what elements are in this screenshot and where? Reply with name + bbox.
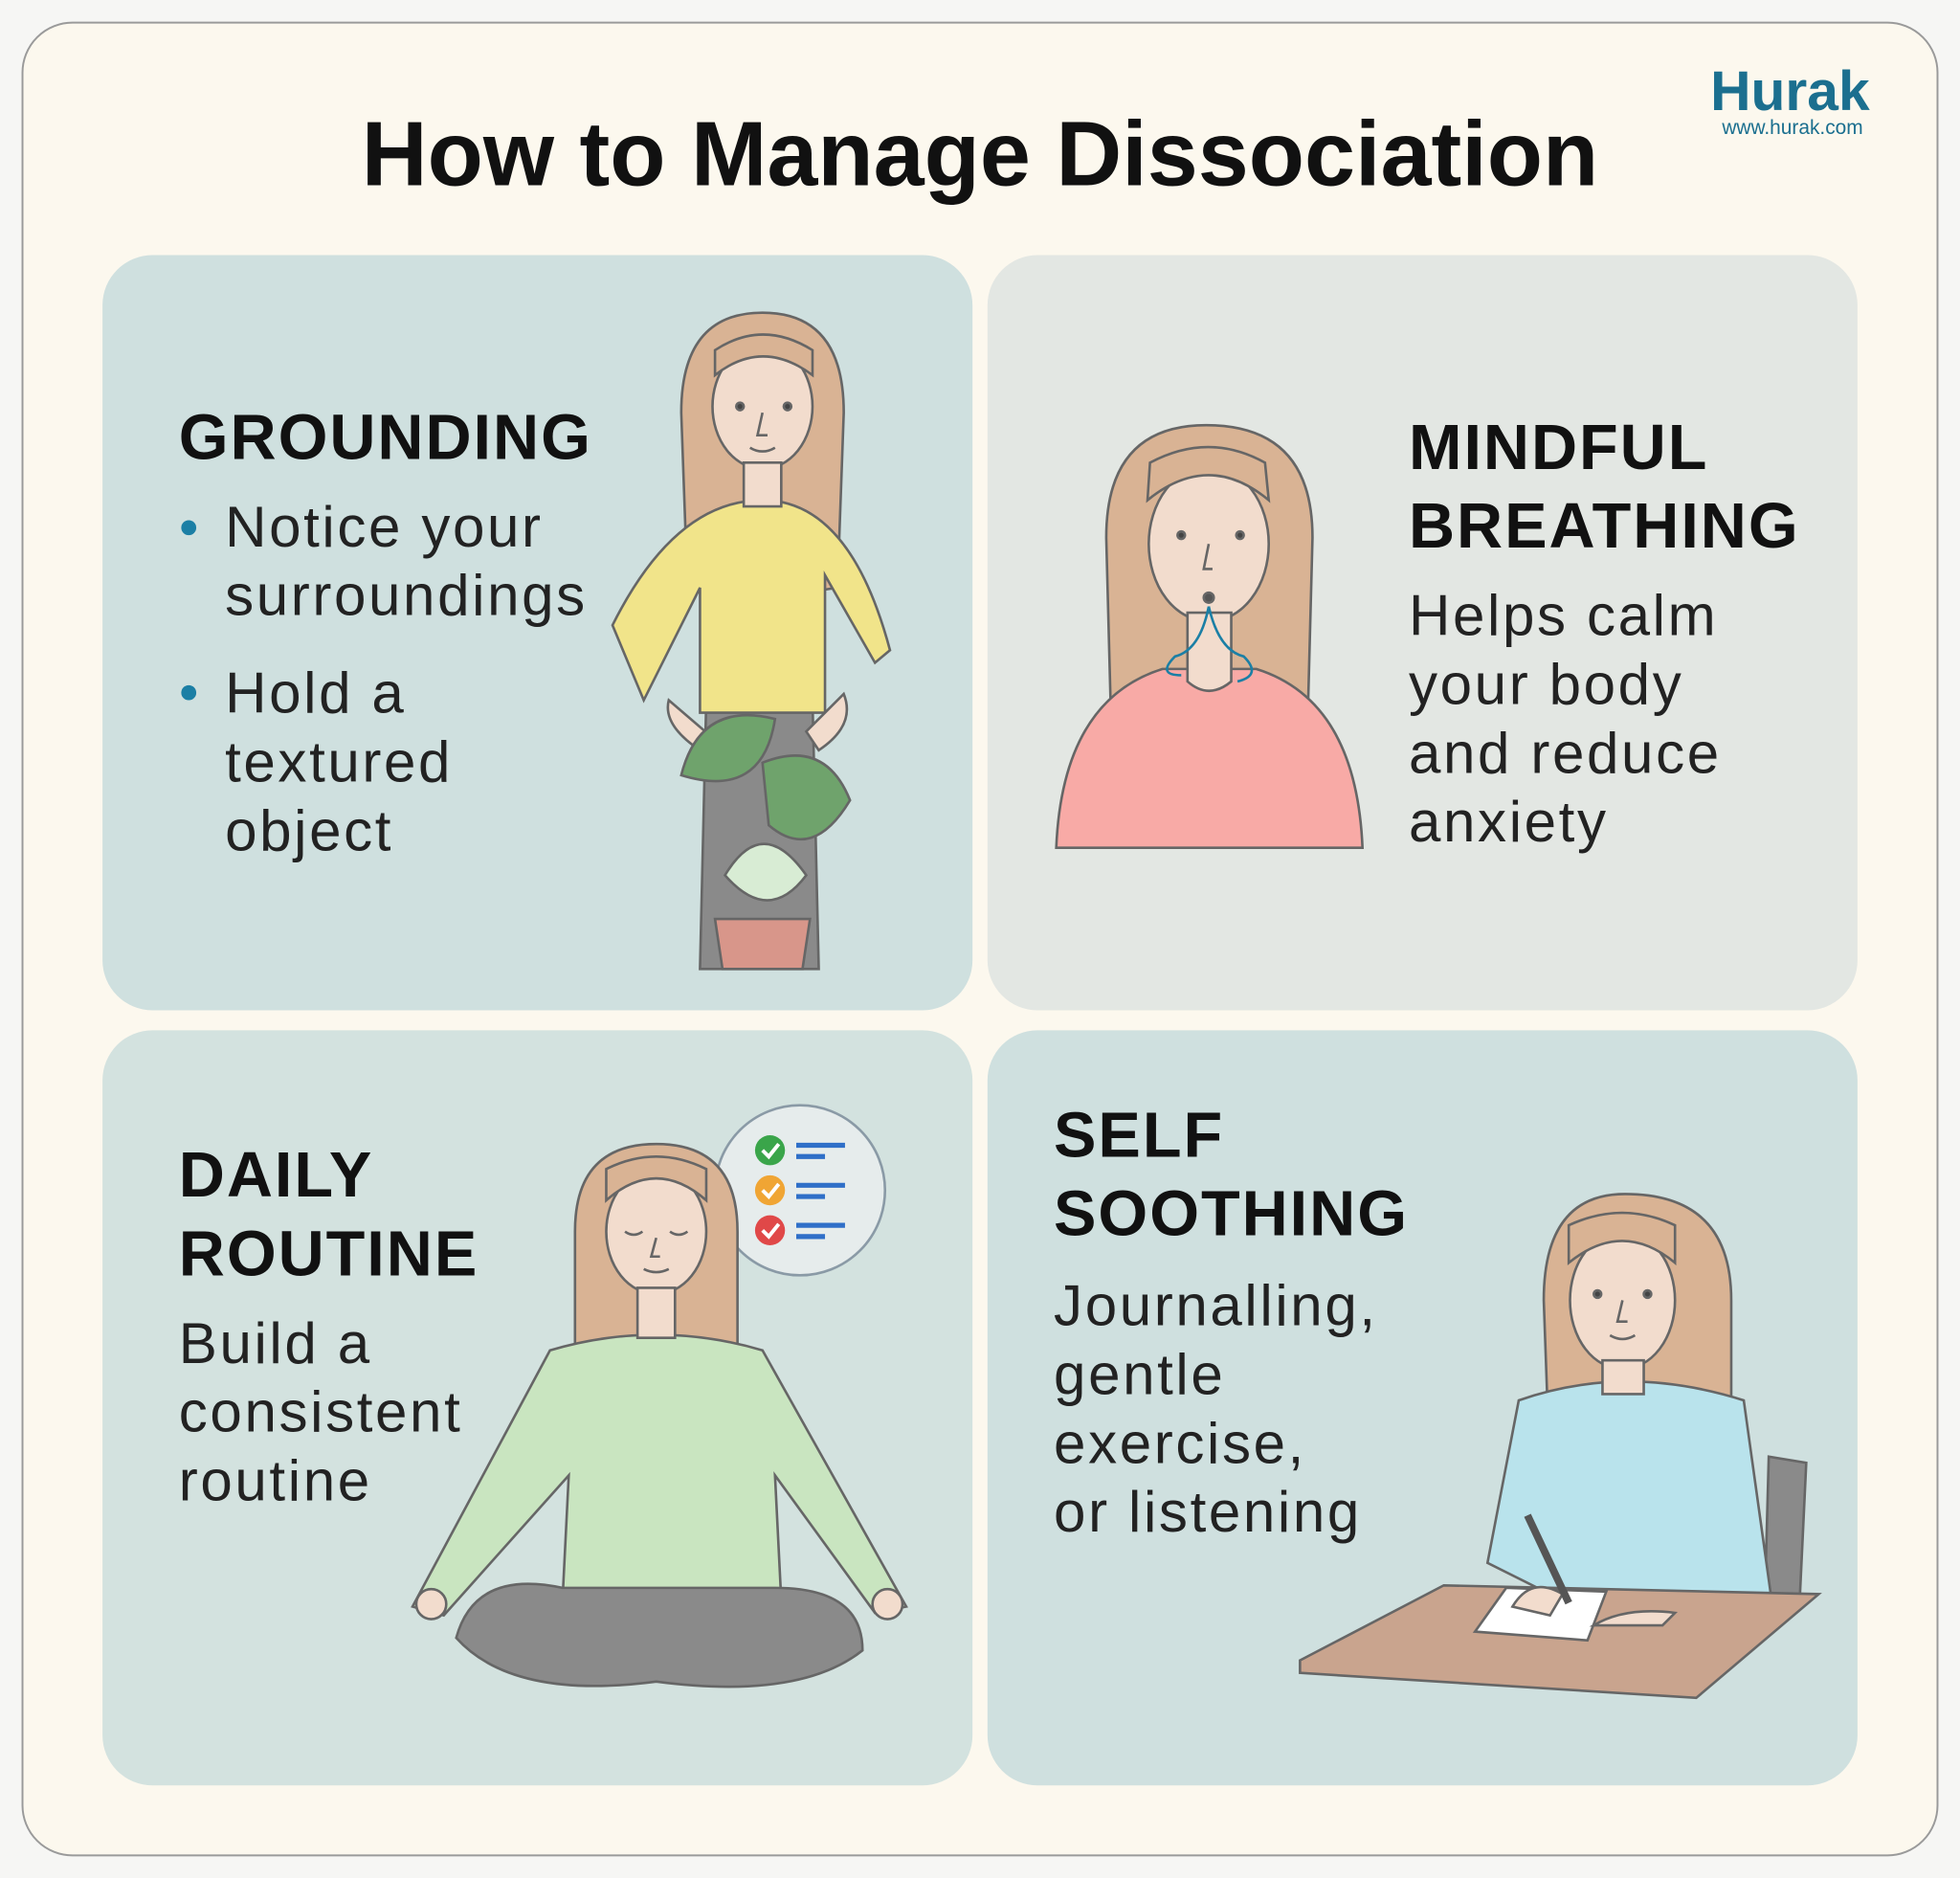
panel: mindful breathing (988, 256, 1858, 1010)
bullet list: grounding (181, 495, 588, 862)
text: mindful breathing: Helps calm (1409, 584, 1718, 648)
heading: daily routine: DAILY (179, 1140, 373, 1211)
illustration: woman holding plant (612, 313, 890, 969)
text: daily routine: consistent (179, 1380, 462, 1444)
text: daily routine (179, 1311, 462, 1512)
text: self soothing: or listening (1054, 1480, 1362, 1544)
title: How to Manage Dissociation (362, 103, 1598, 205)
text: self soothing: exercise, (1054, 1411, 1306, 1475)
panel: daily routine (102, 1030, 972, 1785)
logo: Hurak: www.hurak.com (1721, 117, 1863, 139)
text: mindful breathing (1409, 584, 1722, 854)
text: daily routine: Build a (179, 1311, 372, 1375)
logo: Hurak: Hurak (1710, 60, 1870, 123)
bullet list: grounding: Hold a (225, 661, 406, 726)
panel: self soothing (988, 1030, 1858, 1785)
bullet list: grounding: surroundings (225, 564, 588, 628)
heading: mindful breathing: BREATHING (1409, 491, 1800, 562)
bullet list: grounding: object (225, 798, 393, 862)
text: self soothing: gentle (1054, 1342, 1225, 1406)
text: self soothing (1054, 1274, 1378, 1544)
text: daily routine: routine (179, 1448, 372, 1512)
heading: self soothing: SOOTHING (1054, 1179, 1409, 1250)
illustration: woman meditating (412, 1144, 906, 1687)
illustration: woman breathing (1057, 425, 1363, 848)
bullet list: grounding: Notice your (225, 495, 544, 559)
heading: mindful breathing (1409, 413, 1800, 562)
text: mindful breathing: your body (1409, 652, 1683, 716)
heading: daily routine: ROUTINE (179, 1218, 479, 1289)
heading: self soothing (1054, 1100, 1409, 1250)
illustration: woman journaling (1300, 1194, 1818, 1698)
heading: mindful breathing: MINDFUL (1409, 413, 1708, 483)
text: self soothing: Journalling, (1054, 1274, 1378, 1338)
heading: self soothing: SELF (1054, 1100, 1224, 1171)
icon: checklist (715, 1106, 885, 1275)
panel: grounding (102, 256, 972, 1010)
heading: daily routine (179, 1140, 479, 1289)
heading: grounding: GROUNDING (179, 402, 592, 473)
text: mindful breathing: anxiety (1409, 790, 1609, 854)
text: mindful breathing: and reduce (1409, 721, 1722, 785)
bullet list: grounding: textured (225, 729, 453, 794)
